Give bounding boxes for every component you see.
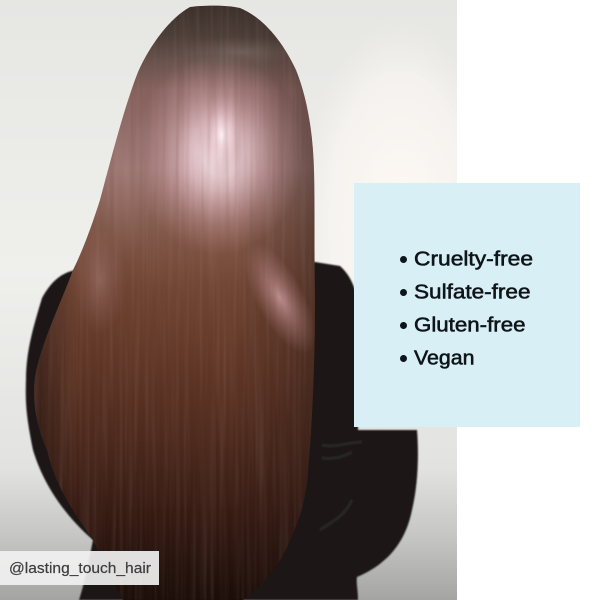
- list item: vegan: Vegan: [414, 348, 474, 370]
- list item: sulfate-free: Sulfate-free: [414, 282, 530, 304]
- feature list: [400, 248, 533, 370]
- panel background: [354, 183, 580, 427]
- list item: gluten-free: Gluten-free: [414, 314, 526, 336]
- info panel: [354, 183, 580, 427]
- photo: long straight hair: [34, 6, 315, 600]
- photo: black jacket: [26, 262, 418, 600]
- photo credit tag: @lasting_touch_hair: [9, 561, 151, 577]
- list item: cruelty-free: Cruelty-free: [414, 248, 533, 270]
- photo credit tag: [0, 551, 159, 585]
